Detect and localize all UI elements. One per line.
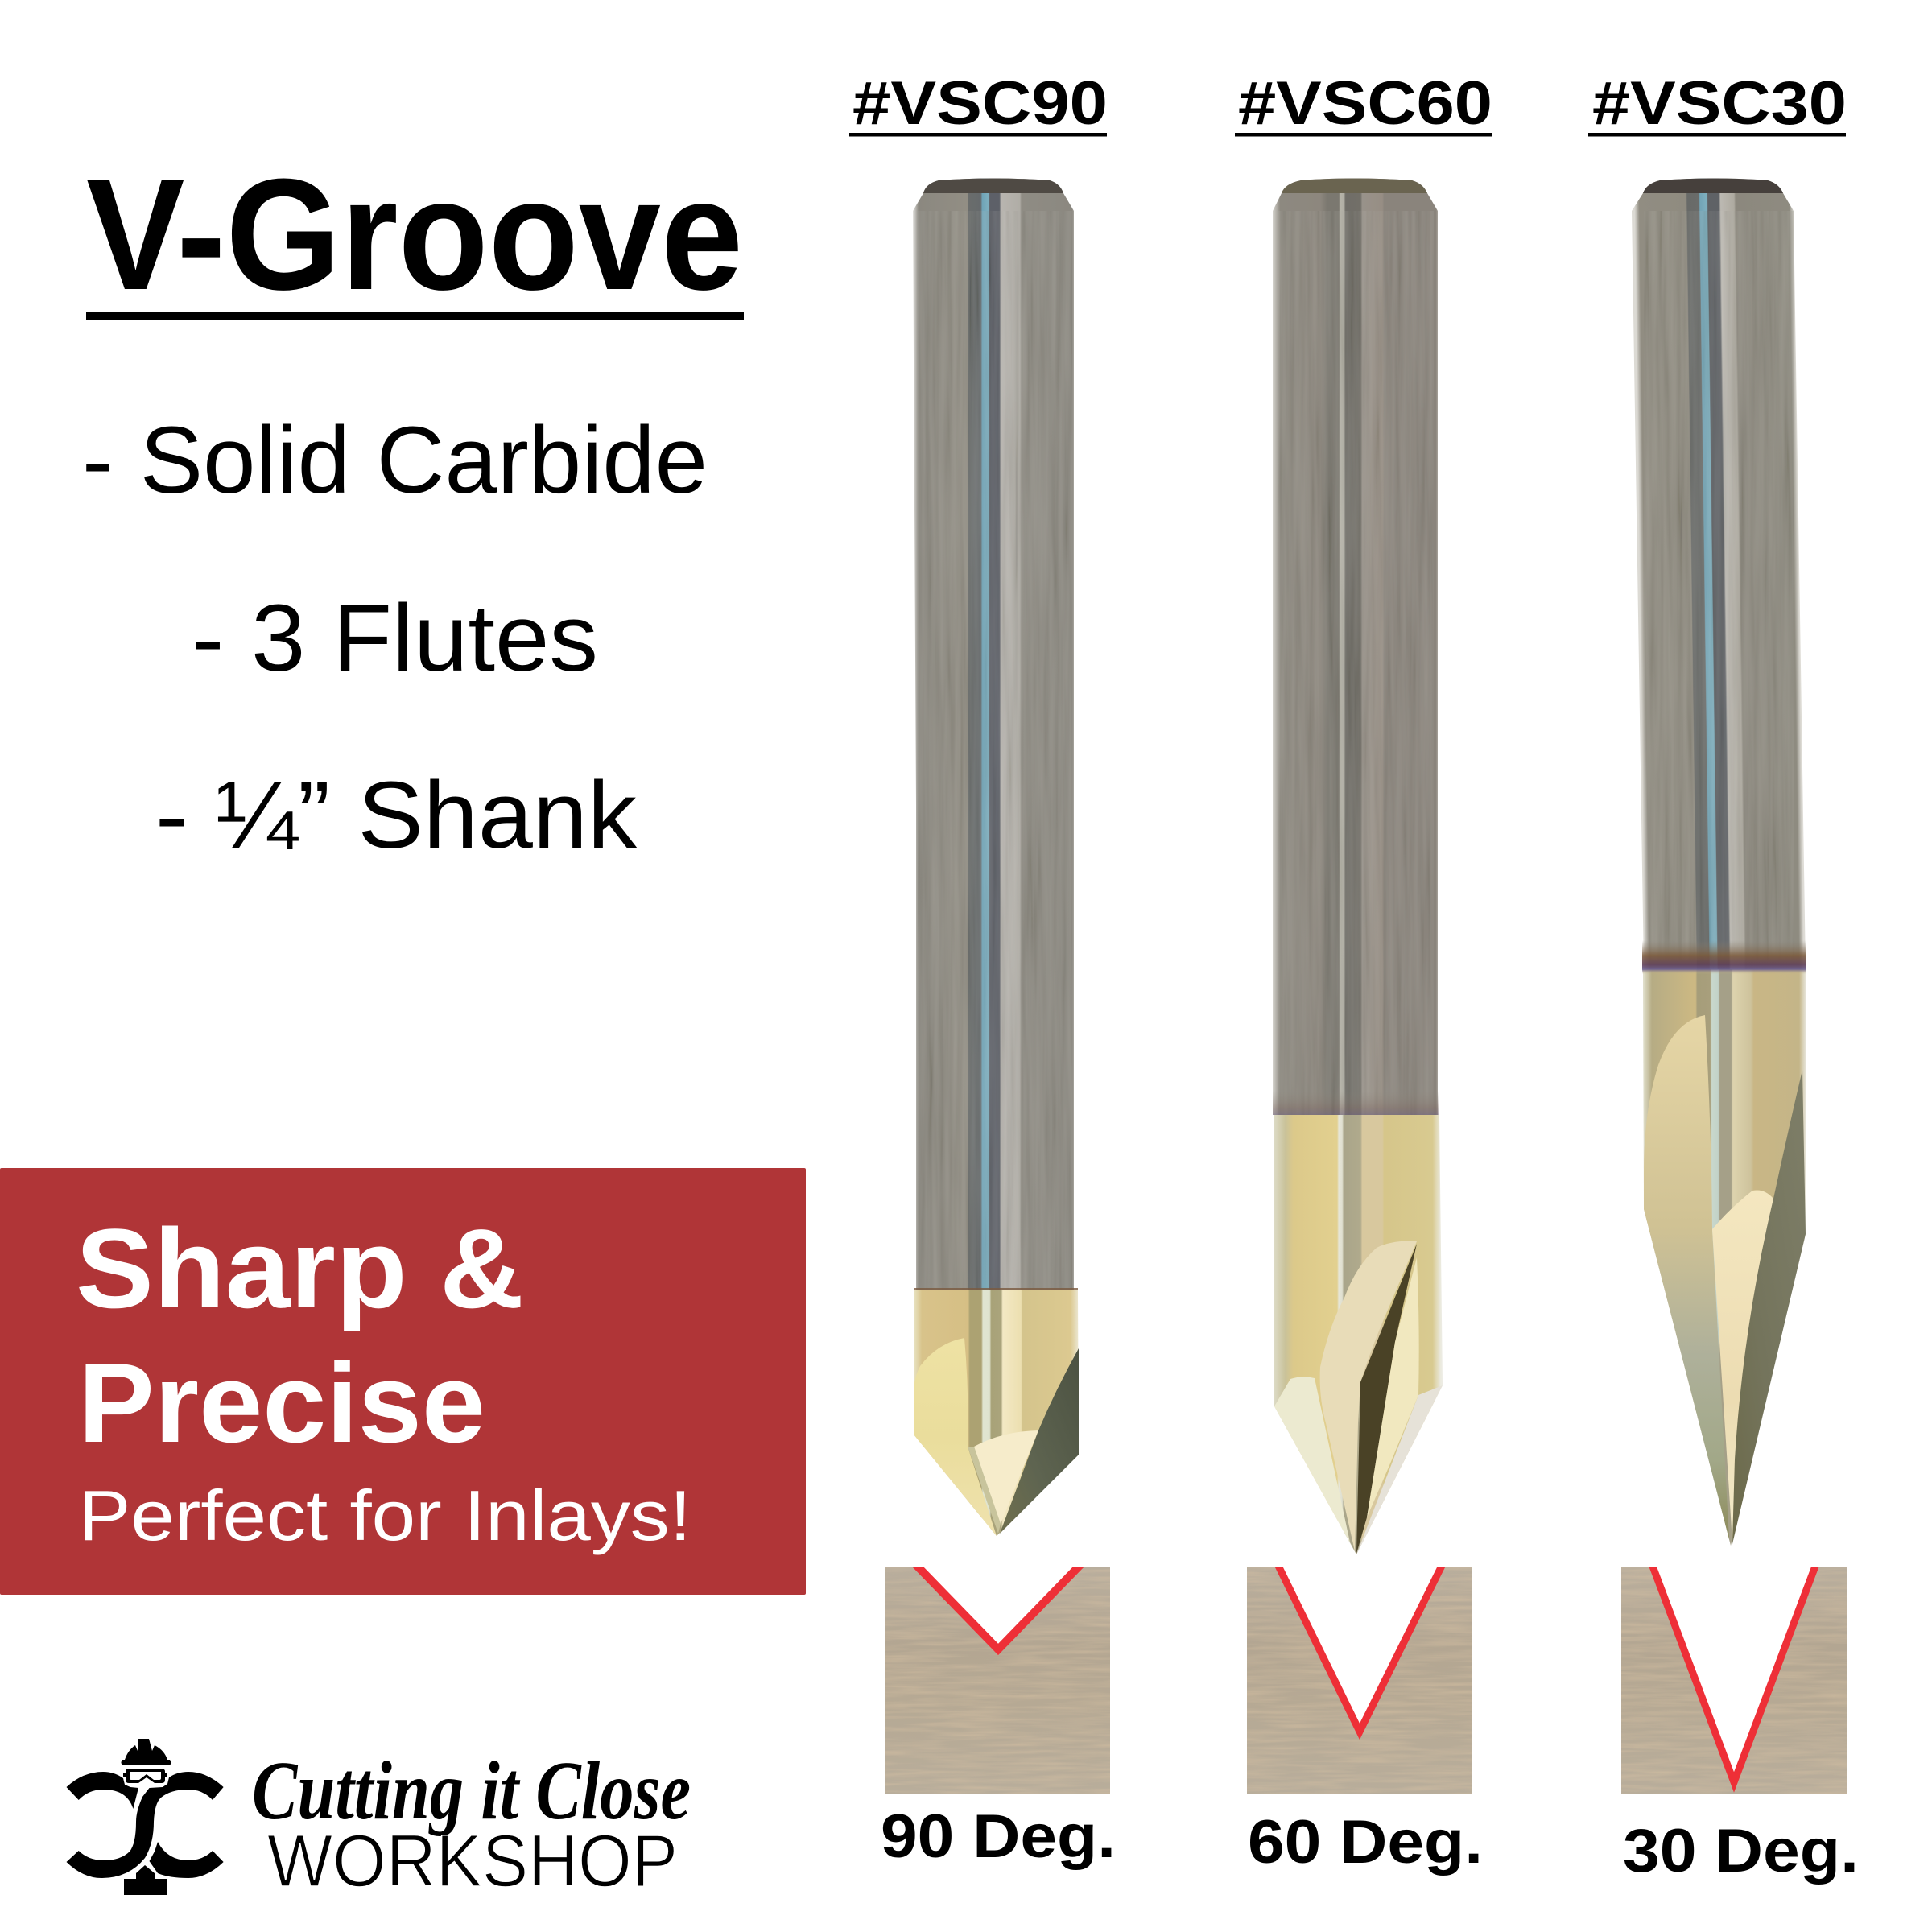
panel: sharp and precise xyxy=(0,1168,806,1595)
shank xyxy=(913,179,1074,1290)
shank xyxy=(1632,179,1806,969)
cutting edge strip xyxy=(968,1447,1001,1534)
feature list xyxy=(82,407,708,869)
shank end cap xyxy=(923,179,1063,193)
dark flute xyxy=(1732,1070,1806,1544)
groove diagram: 30 degree xyxy=(1621,1564,1847,1794)
dark flute xyxy=(1356,1244,1417,1554)
gold coated tip xyxy=(914,1290,1079,1536)
product label: VSC60: #VSC60 xyxy=(1238,69,1492,138)
title: V-Groove: V-Groove xyxy=(86,146,743,323)
shank brushed texture xyxy=(918,211,1072,1290)
polished flute face xyxy=(1367,1257,1419,1517)
right relief face xyxy=(1356,1385,1443,1554)
polished facet xyxy=(974,1430,1038,1524)
panel heading: Sharp & xyxy=(76,1205,524,1331)
shank end cap xyxy=(1282,179,1427,193)
angle label: 90 degrees: 90 Deg. xyxy=(881,1802,1116,1871)
wordmark: Workshop: WORKSHOP xyxy=(267,1820,678,1902)
shank brushed texture xyxy=(1278,211,1434,1115)
colour change band xyxy=(1273,1091,1439,1115)
shank end cap xyxy=(1643,179,1783,193)
router bit: 30 degree xyxy=(1632,179,1806,1546)
ground lobe xyxy=(1644,1015,1729,1539)
logo: Cutting it Close Workshop xyxy=(66,1739,691,1902)
panel subheading: Perfect for Inlays! xyxy=(78,1476,691,1555)
coloured heat band xyxy=(1642,940,1806,974)
groove diagram: 90 degree xyxy=(886,1564,1110,1794)
feature: quarter inch shank: - ¼” Shank xyxy=(155,762,638,869)
feature: 3 flutes: - 3 Flutes xyxy=(192,585,598,691)
small left facet xyxy=(1274,1377,1356,1554)
shank brushed texture xyxy=(1644,211,1794,960)
product label: VSC90: #VSC90 xyxy=(852,69,1108,138)
gold coated tip xyxy=(1643,969,1806,1546)
panel heading xyxy=(76,1205,524,1466)
router bit: 60 degree xyxy=(1273,179,1443,1554)
groove diagram: 60 degree xyxy=(1247,1564,1472,1794)
large lobe xyxy=(1320,1241,1417,1551)
angle label: 30 degrees: 30 Deg. xyxy=(1623,1817,1859,1885)
router bit: 90 degree xyxy=(913,179,1079,1536)
wordmark: Cutting it Close: Cutting it Close xyxy=(252,1744,691,1837)
polished facet xyxy=(1712,1190,1773,1542)
colour change line xyxy=(914,1288,1078,1290)
icon: hard hat and goggles monogram xyxy=(66,1739,224,1895)
feature: solid carbide: - Solid Carbide xyxy=(82,407,708,514)
gold coated tip xyxy=(1274,1115,1443,1554)
product label: VSC30: #VSC30 xyxy=(1592,69,1847,138)
dark flute xyxy=(1000,1348,1079,1534)
ground lobe xyxy=(914,1338,997,1536)
panel heading: Precise xyxy=(78,1340,485,1466)
shank xyxy=(1273,179,1438,1115)
angle label: 60 degrees: 60 Deg. xyxy=(1248,1808,1483,1876)
